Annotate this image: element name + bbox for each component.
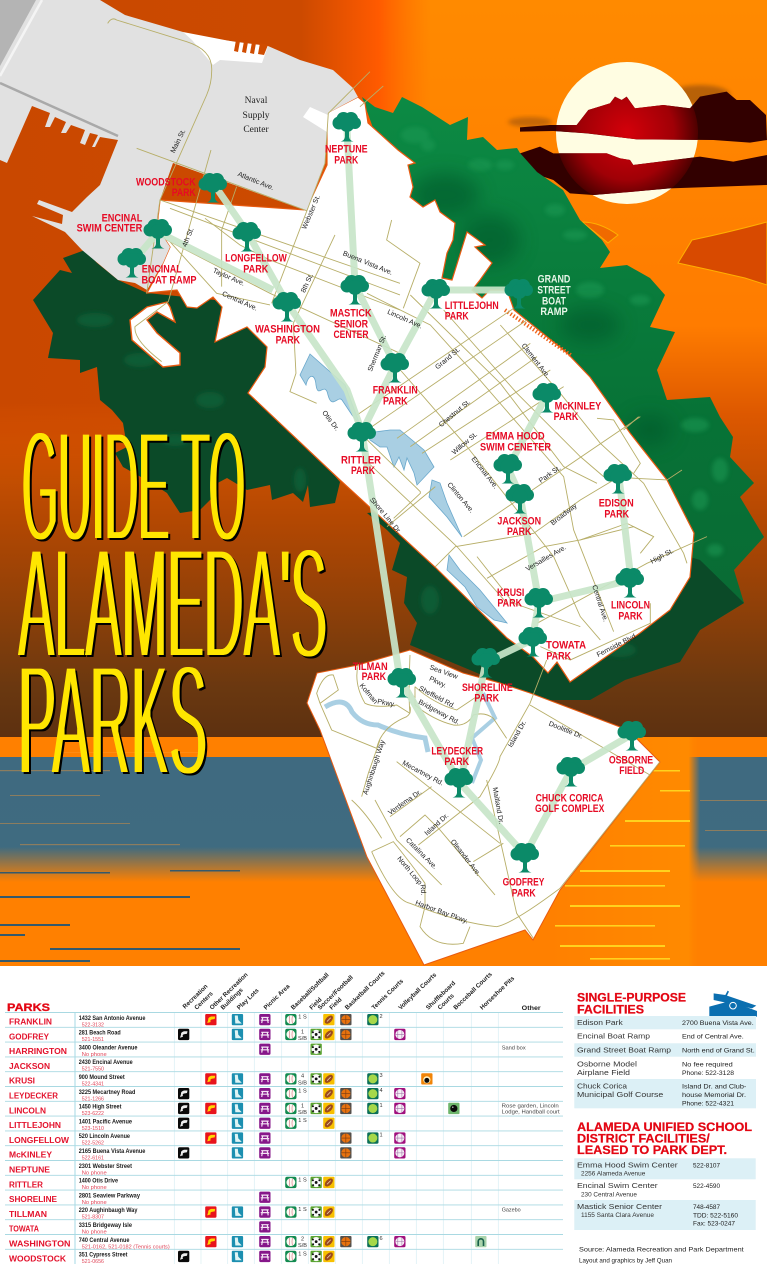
row: Franklin: 2 <box>380 1014 383 1020</box>
street name labels: Chestnut St. <box>438 399 472 429</box>
rotated column headers: Bocceball Courts <box>452 971 494 1011</box>
row: Harrington: No phone <box>82 1052 107 1058</box>
row: Littlejohn: LITTLEJOHN <box>9 1120 61 1130</box>
school district facilities list: 2256 Alameda Avenue <box>581 1172 646 1178</box>
row: Jackson: 2430 Encinal Avenue <box>79 1059 133 1066</box>
row: Tillman: TILLMAN <box>9 1209 47 1219</box>
row: Krusi: KRUSI <box>9 1076 35 1086</box>
heading: Alameda Unified School District facilities: LEASED TO PARK DEPT. <box>577 1143 727 1157</box>
street name labels: Sheffield Rd. <box>417 685 456 710</box>
rotated column headers: Volleyball Courts <box>397 971 439 1011</box>
single-purpose facilities list: Island Dr. and Club- <box>682 1084 746 1091</box>
row: Littlejohn: 1 S <box>298 1118 307 1124</box>
street name labels: Doolittle Dr. <box>547 721 584 741</box>
row: Lincoln: 1 <box>380 1103 383 1109</box>
row: Harrington: 3400 Oleander Avenue <box>79 1044 138 1051</box>
street name labels: Pkwy. <box>428 676 447 690</box>
single-purpose facilities list <box>574 1016 756 1108</box>
place name: Naval Supply Center: Supply <box>243 111 270 121</box>
rotated column headers: Courts <box>437 992 456 1011</box>
park: Mastick Senior Center: MASTICK <box>330 308 372 320</box>
park: Krusi: PARK <box>497 598 522 610</box>
row: Towata <box>9 1221 270 1236</box>
park: Neptune: PARK <box>334 154 358 166</box>
row: Leydecker: 521-1266 <box>82 1096 105 1102</box>
row: Woodstock: 351 Cypress Street <box>79 1252 128 1259</box>
row: Woodstock <box>9 1251 334 1264</box>
park: Chuck Corica Golf Complex <box>535 757 605 815</box>
street name labels: Rd. <box>419 884 426 896</box>
park: Mastick Senior Center <box>330 275 372 341</box>
street name labels: Bridgeway Rd. <box>417 699 460 726</box>
street name labels: Mecartney Rd. <box>401 760 444 787</box>
street name labels: Catalina Ave. <box>404 837 438 871</box>
street name labels: Maitland Dr. <box>491 787 504 825</box>
park: Woodstock: WOODSTOCK <box>136 176 196 188</box>
Bay Farm Island land <box>307 650 660 965</box>
park: Encinal Boat Ramp <box>118 248 196 286</box>
row: Leydecker <box>9 1088 406 1102</box>
park: Rittler: PARK <box>351 465 375 477</box>
row: Krusi: 900 Mound Street <box>79 1074 125 1081</box>
title: Guide to Alameda's Parks: PARKS <box>18 631 207 809</box>
school district facilities list: 230 Central Avenue <box>581 1192 638 1198</box>
school district facilities list: Emma Hood Swim Center <box>577 1160 678 1169</box>
park: Littlejohn <box>422 279 499 323</box>
park: Godfrey: PARK <box>512 887 536 899</box>
row: Lincoln: 1450 High Street <box>79 1104 122 1111</box>
heading: Single-purpose facilities: FACILITIES <box>577 1003 644 1017</box>
row: Neptune <box>9 1163 133 1176</box>
water <box>0 737 767 966</box>
school district facilities list: 522-4590 <box>693 1183 720 1190</box>
park: Emma Hood Swim Center: EMMA HOOD <box>486 431 545 443</box>
row: Tillman <box>9 1206 521 1221</box>
sunset sky background <box>0 0 767 740</box>
rotated column headers: Other Recreation <box>209 971 250 1011</box>
row: Godfrey: GODFREY <box>9 1031 49 1041</box>
row: McKinley: 2165 Buena Vista Avenue <box>79 1148 146 1155</box>
park: Shoreline: SHORELINE <box>462 682 513 694</box>
source credit <box>579 1247 744 1264</box>
row: Jackson <box>9 1059 133 1073</box>
row: Leydecker: 4 <box>380 1088 383 1094</box>
park: Franklin <box>373 353 418 407</box>
row: Longfellow: LONGFELLOW <box>9 1135 70 1145</box>
street name labels: Sea View <box>428 664 459 681</box>
row: Lincoln: 1 <box>301 1103 304 1109</box>
row: Washington: 521-0162, 521-0182 (Tennis courts) <box>82 1244 170 1250</box>
row: Shoreline: No phone <box>82 1200 107 1206</box>
school district facilities list: Encinal Swim Center <box>577 1181 658 1190</box>
rotated column headers: Tennis Courts <box>371 977 405 1011</box>
park: Encinal Boat Ramp: ENCINAL <box>142 264 182 276</box>
row: Godfrey <box>9 1029 406 1043</box>
row: Washington: 2 <box>301 1236 304 1242</box>
heading: Single-purpose facilities <box>577 991 686 1017</box>
row: Krusi: 4 <box>301 1074 304 1080</box>
row: Rittler: 1 S <box>298 1177 307 1183</box>
pier hatching <box>505 310 572 356</box>
row: Leydecker: LEYDECKER <box>9 1090 59 1100</box>
park: Longfellow: PARK <box>243 263 268 275</box>
park: Osborne Field: OSBORNE <box>609 754 653 766</box>
park: Tilman: PARK <box>362 671 386 683</box>
park: Neptune <box>325 112 368 166</box>
street name labels: Island Dr. <box>424 812 450 837</box>
sun with dark clouds <box>508 62 767 204</box>
row: Tillman: 521-8307 <box>82 1215 104 1221</box>
row: Longfellow: 522-5262 <box>82 1141 104 1147</box>
row: Franklin <box>9 1014 383 1028</box>
street name labels: Aughinbaugh Way <box>362 739 387 796</box>
single-purpose facilities list: Phone: 522-4321 <box>682 1100 734 1107</box>
street name labels: Pkwy. <box>377 698 396 709</box>
single-purpose facilities list: End of Central Ave. <box>682 1034 744 1041</box>
park connector paths <box>132 130 631 855</box>
park: Krusi <box>497 587 553 618</box>
row: Godfrey: 281 Beach Road <box>79 1030 121 1037</box>
street name labels: Atlantic Ave. <box>236 171 275 192</box>
park: Godfrey: GODFREY <box>503 877 545 889</box>
park: Franklin: PARK <box>383 395 408 407</box>
row: Jackson: JACKSON <box>9 1061 50 1071</box>
park: Krusi: KRUSI <box>497 587 524 599</box>
park: Edison: PARK <box>604 508 629 520</box>
park: Woodstock <box>136 173 227 202</box>
street name labels: Shore Line Dr. <box>368 497 402 535</box>
street name labels: Grand St. <box>434 347 462 371</box>
park: Encinal Boat Ramp: BOAT RAMP <box>142 274 196 286</box>
row: Woodstock: 1 S <box>298 1251 307 1257</box>
harbor inlet land <box>130 302 180 367</box>
street name labels: Willow St. <box>451 431 479 456</box>
park: Edison <box>599 464 634 520</box>
row: Harrington <box>9 1044 526 1058</box>
street name labels <box>170 128 675 925</box>
street name labels: Fernside Blvd. <box>596 632 639 659</box>
row: Godfrey: S/B <box>298 1036 307 1042</box>
street name labels: Otis Dr. <box>320 410 340 432</box>
heading: Single-purpose facilities: SINGLE-PURPOSE <box>577 991 686 1005</box>
main island land <box>147 97 694 682</box>
row: Shoreline: 2801 Seaview Parkway <box>79 1192 140 1199</box>
single-purpose facilities list: Grand Street Boat Ramp <box>577 1046 671 1055</box>
heading: Alameda Unified School District facilities <box>577 1120 752 1157</box>
park: Shoreline: PARK <box>474 693 499 705</box>
park: Emma Hood Swim Center: SWIM CENETER <box>480 442 551 454</box>
street name labels: Island Dr. <box>507 720 528 749</box>
single-purpose facilities list: 2700 Buena Vista Ave. <box>682 1020 754 1027</box>
park: Grand Street Boat Ramp <box>504 274 571 318</box>
street name labels: Lincoln Ave. <box>386 309 423 330</box>
row: Washington: WASHINGTON <box>9 1238 70 1248</box>
rotated column headers: Field <box>328 996 344 1011</box>
row: Krusi: 3 <box>380 1073 383 1079</box>
row: Longfellow: 1 <box>380 1132 383 1138</box>
park: Lincoln <box>611 568 650 622</box>
park: Encinal Swim Center: ENCINAL <box>102 212 143 224</box>
street name labels: Sherman St. <box>367 334 388 373</box>
row: Washington: 6 <box>380 1236 383 1242</box>
street name labels: Versailles Ave. <box>525 544 568 573</box>
row: McKinley <box>9 1147 406 1162</box>
park: Leydecker: PARK <box>444 756 469 768</box>
single-purpose facilities list: house Memorial Dr. <box>682 1092 746 1099</box>
school district facilities list: Fax: 523-0247 <box>693 1221 735 1228</box>
park: Leydecker: LEYDECKER <box>431 745 483 757</box>
street name labels: Central Ave. <box>221 291 258 313</box>
school district facilities list: Mastick Senior Center <box>577 1202 663 1211</box>
place name: Naval Supply Center: Naval <box>245 96 268 106</box>
park: Washington: WASHINGTON <box>255 324 320 336</box>
row: McKinley: McKINLEY <box>9 1150 52 1160</box>
row: Littlejohn: 1401 Pacific Avenue <box>79 1118 132 1125</box>
single-purpose facilities list: Phone: 522-3128 <box>682 1070 734 1077</box>
park: Rittler: RITTLER <box>341 454 381 466</box>
single-purpose facilities list: Encinal Boat Ramp <box>577 1032 650 1041</box>
rotated column headers: Baseball/Softball <box>290 972 331 1011</box>
park: Tilman: TILMAN <box>353 661 388 673</box>
row: Harrington: Sand box <box>502 1046 526 1052</box>
park: Grand Street Boat Ramp: GRAND <box>538 274 570 286</box>
rotated column headers: Buildings <box>220 986 245 1011</box>
row: Rittler: 1400 Otis Drive <box>79 1178 118 1185</box>
row: Rittler: RITTLER <box>9 1179 44 1189</box>
row: Franklin: FRANKLIN <box>9 1016 52 1026</box>
white table panel background <box>0 966 767 1264</box>
school district facilities list: 522-8107 <box>693 1162 720 1169</box>
row: Washington <box>9 1236 486 1250</box>
row: Lincoln: 523-6222 <box>82 1111 104 1117</box>
park: McKinley: PARK <box>554 411 578 423</box>
row: Godfrey: 1 <box>301 1029 304 1035</box>
park: Tilman <box>353 661 416 698</box>
park: Jackson: PARK <box>507 526 531 538</box>
park: Osborne Field: FIELD <box>619 765 644 777</box>
park: Emma Hood Swim Center <box>480 431 551 484</box>
park: Encinal Swim Center <box>77 212 172 248</box>
park: Chuck Corica Golf Complex: GOLF COMPLEX <box>535 803 605 815</box>
rotated column headers <box>182 969 541 1012</box>
source credit: Source: Alameda Recreation and Park Department <box>579 1247 744 1254</box>
row: Franklin: 1 S <box>298 1014 307 1020</box>
row: Littlejohn: 523-1510 <box>82 1126 105 1132</box>
school district facilities list <box>574 1158 756 1230</box>
park: Grand Street Boat Ramp: RAMP <box>540 306 568 318</box>
school district facilities list: 1155 Santa Clara Avenue <box>581 1213 655 1219</box>
rotated column headers: Horseshoe Pits <box>479 975 516 1011</box>
row: Tillman: 1 S <box>298 1207 307 1213</box>
park: Towata <box>518 627 586 662</box>
street name labels: Oleander Ave. <box>449 838 482 878</box>
row: Tillman: 220 Aughinbaugh Way <box>79 1207 138 1214</box>
table heading: Parks: PARKS <box>7 1002 50 1014</box>
park: Towata: PARK <box>546 650 571 662</box>
naval air station land <box>0 0 358 290</box>
park: Encinal Swim Center: SWIM CENTER <box>77 223 142 235</box>
street name labels: Buena Vista Ave. <box>342 250 394 277</box>
park: Osborne Field <box>609 721 653 777</box>
park: Longfellow <box>225 222 287 275</box>
row: Krusi <box>9 1073 432 1088</box>
park: Jackson: JACKSON <box>497 515 541 527</box>
row: Godfrey: 521-1551 <box>82 1037 104 1043</box>
park: McKinley <box>532 383 602 423</box>
title: Guide to Alameda's Parks <box>18 397 327 809</box>
heading: Alameda Unified School District facilities: DISTRICT FACILITIES/ <box>577 1131 710 1145</box>
parks table grid <box>5 1012 563 1264</box>
park: Leydecker <box>431 745 483 798</box>
rotated column headers: Shuffleboard <box>425 980 457 1011</box>
place name: Naval Supply Center: Center <box>243 125 269 135</box>
row: Shoreline: SHORELINE <box>9 1194 57 1204</box>
row: Longfellow <box>9 1132 406 1147</box>
park: Longfellow: LONGFELLOW <box>225 253 287 265</box>
street name labels: High St. <box>650 548 675 566</box>
row: McKinley: 522-6161 <box>82 1156 104 1162</box>
park: Mastick Senior Center: SENIOR <box>334 318 368 330</box>
street name labels: Webster St. <box>301 194 322 231</box>
street name labels: Verdema Dr. <box>387 789 423 817</box>
park: Franklin: FRANKLIN <box>373 385 418 397</box>
street name labels: Central Ave. <box>590 584 609 623</box>
street name labels: Clement Ave. <box>520 343 551 380</box>
street name labels: Taylor Ave. <box>212 267 246 288</box>
park: Godfrey <box>503 843 545 899</box>
single-purpose facilities list: Municipal Golf Course <box>577 1090 663 1099</box>
park: Jackson <box>497 484 541 538</box>
park: Edison: EDISON <box>599 498 634 510</box>
park: Littlejohn: PARK <box>445 311 469 323</box>
row: Littlejohn <box>9 1118 334 1132</box>
park: Grand Street Boat Ramp: STREET <box>537 284 571 296</box>
single-purpose facilities list: Chuck Corica <box>577 1082 628 1091</box>
park: Lincoln: LINCOLN <box>611 600 650 612</box>
single-purpose facilities list: No fee required <box>682 1062 733 1069</box>
street name labels: Broadway <box>550 502 579 527</box>
rotated column headers: Centers <box>193 990 215 1011</box>
lagoons <box>300 354 507 783</box>
row: Rittler <box>9 1177 334 1191</box>
row: Neptune: 2301 Webster Street <box>79 1163 133 1170</box>
school district facilities list: 748-4587 <box>693 1204 720 1211</box>
row: Harrington: HARRINGTON <box>9 1046 67 1056</box>
row: Franklin: 522-3132 <box>82 1022 104 1028</box>
park: Washington <box>255 292 320 346</box>
row: Towata: TOWATA <box>9 1224 40 1234</box>
row: Woodstock: WOODSTOCK <box>9 1253 67 1263</box>
street name labels: North Loop <box>395 856 423 887</box>
row: Franklin: 1432 San Antonio Avenue <box>79 1015 146 1022</box>
single-purpose facilities list: North end of Grand St. <box>682 1048 755 1055</box>
row: Shoreline <box>9 1192 270 1206</box>
row: Lincoln: LINCOLN <box>9 1105 46 1115</box>
street name labels: Encinal Ave. <box>470 456 499 490</box>
street name labels: 8th St. <box>300 273 315 294</box>
row: Neptune: NEPTUNE <box>9 1164 50 1174</box>
road network <box>108 19 707 944</box>
park: Rittler <box>341 422 381 477</box>
row: Washington: S/B <box>298 1243 307 1249</box>
park: McKinley: McKINLEY <box>555 400 602 412</box>
row: Towata: No phone <box>82 1230 107 1236</box>
row: Lincoln <box>9 1103 560 1117</box>
single-purpose facilities list: Edison Park <box>577 1018 623 1027</box>
park: Littlejohn: LITTLEJOHN <box>445 300 499 312</box>
row: Lincoln: S/B <box>298 1110 307 1116</box>
street name labels: 4th St. <box>182 227 196 248</box>
rotated column headers: Other <box>522 1005 541 1012</box>
park: Grand Street Boat Ramp: BOAT <box>542 295 566 307</box>
row: Washington: 740 Central Avenue <box>79 1237 130 1244</box>
single-purpose facilities list: Osborne Model <box>577 1060 637 1069</box>
park: Mastick Senior Center: CENTER <box>334 329 369 341</box>
row: Lincoln: Rose garden, Lincoln <box>502 1104 559 1110</box>
orange clouds <box>582 222 767 285</box>
row: Longfellow: 520 Lincoln Avenue <box>79 1133 130 1140</box>
rotated column headers: Recreation <box>182 983 210 1010</box>
park: Towata: TOWATA <box>546 639 586 651</box>
rotated column headers: Field <box>308 996 324 1011</box>
row: Tillman: Gazebo <box>502 1208 521 1214</box>
row: Towata: 3315 Bridgeway Isle <box>79 1222 132 1229</box>
row: Krusi: S/B <box>298 1080 307 1086</box>
street name labels: Park St. <box>538 465 562 485</box>
row: Neptune: No phone <box>82 1170 107 1176</box>
rotated column headers: Play Lots <box>236 987 261 1011</box>
park: Washington: PARK <box>276 334 300 346</box>
rotated column headers: Picnic Area <box>263 983 292 1011</box>
street name labels: Clinton Ave. <box>446 482 475 515</box>
park: Neptune: NEPTUNE <box>325 144 368 156</box>
rotated column headers: Basketball Courts <box>344 969 387 1011</box>
row: Krusi: 522-4341 <box>82 1082 104 1088</box>
icon: boat ramp <box>709 991 757 1017</box>
single-purpose facilities list: Airplane Field <box>577 1068 630 1077</box>
forest: right bright green <box>362 97 764 640</box>
row: Leydecker: 3225 Mecartney Road <box>79 1089 136 1096</box>
park: Woodstock: PARK <box>172 187 196 199</box>
rotated column headers: Soccer/Football <box>317 974 355 1011</box>
forest: dark green west and south <box>33 250 744 700</box>
park: Chuck Corica Golf Complex: CHUCK CORICA <box>536 793 603 805</box>
row: Lincoln: Lodge, Handball court <box>502 1109 560 1115</box>
heading: Alameda Unified School District facilities: ALAMEDA UNIFIED SCHOOL <box>577 1120 752 1134</box>
row: Leydecker: 1 S <box>298 1088 307 1094</box>
park: Shoreline <box>462 648 513 705</box>
row: Rittler: No phone <box>82 1185 107 1191</box>
street name labels: Main St. <box>170 128 187 154</box>
place name: Naval Supply Center <box>243 96 270 135</box>
school district facilities list: TDD: 522-5160 <box>693 1213 738 1220</box>
row: Jackson: 521-7550 <box>82 1067 105 1073</box>
street name labels: Harbor Bay Pkwy. <box>414 900 469 925</box>
street name labels: Kofman <box>358 683 379 706</box>
text: GUIDE TO <box>22 397 245 575</box>
park: Lincoln: PARK <box>618 610 643 622</box>
